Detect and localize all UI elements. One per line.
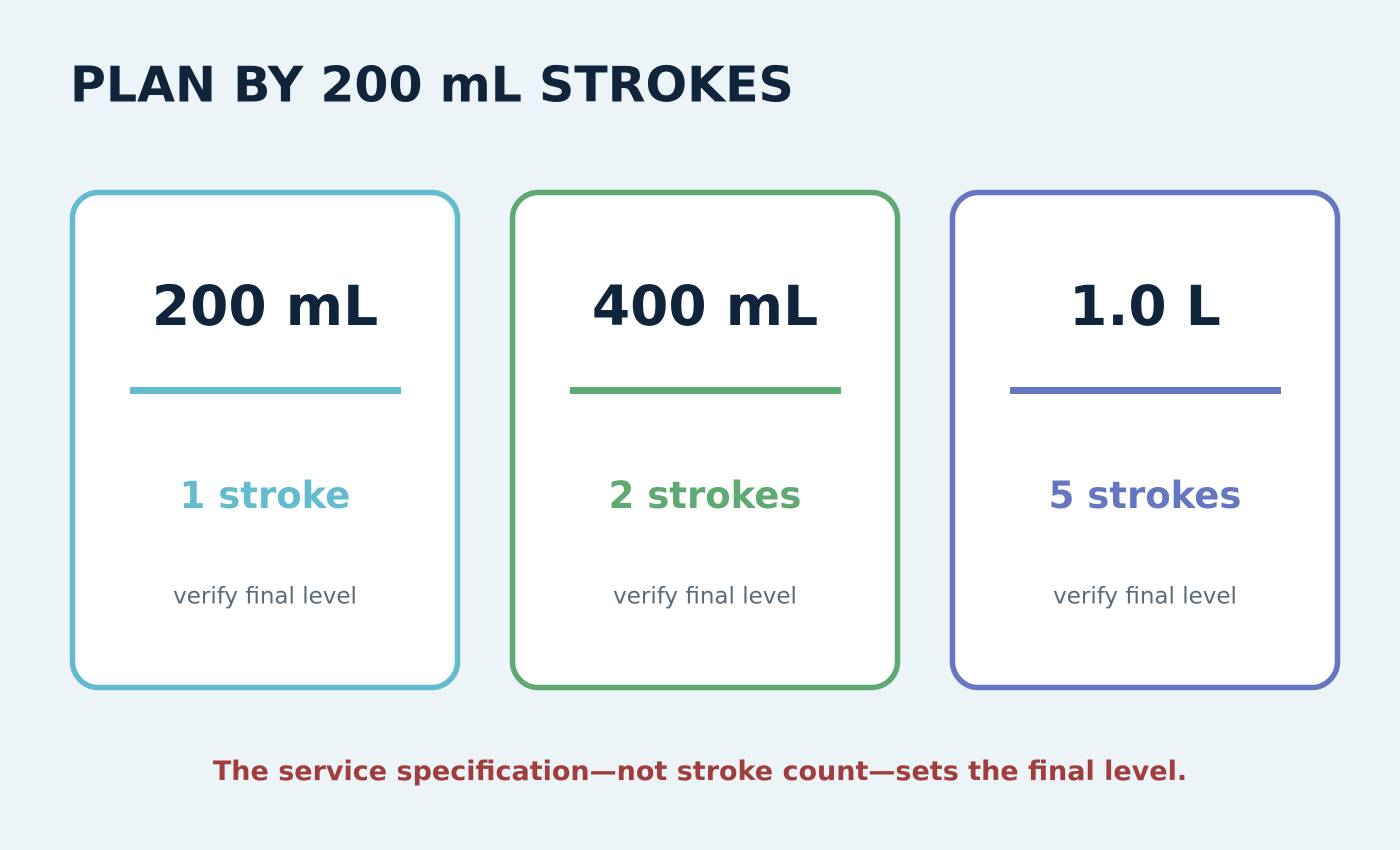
footer statement: The service specification—not stroke count—sets the final level. <box>213 756 1187 787</box>
stroke count: 2 strokes <box>609 474 801 517</box>
accent bar <box>1010 387 1281 394</box>
accent bar <box>570 387 841 394</box>
card border <box>512 192 898 688</box>
volume: 200 mL <box>152 274 378 338</box>
note: verify final level <box>1053 584 1237 610</box>
panel: 1.0 L card <box>952 192 1338 688</box>
volume: 1.0 L <box>1069 274 1221 338</box>
accent bar <box>130 387 401 394</box>
title: PLAN BY 200 mL STROKES <box>70 56 794 114</box>
card border <box>952 192 1338 688</box>
stroke count: 5 strokes <box>1049 474 1241 517</box>
note: verify final level <box>613 584 797 610</box>
note: verify final level <box>173 584 357 610</box>
card border <box>72 192 458 688</box>
panel: 400 mL card <box>512 192 898 688</box>
volume: 400 mL <box>592 274 818 338</box>
stroke count: 1 stroke <box>180 474 350 517</box>
panel: 200 mL card <box>72 192 458 688</box>
